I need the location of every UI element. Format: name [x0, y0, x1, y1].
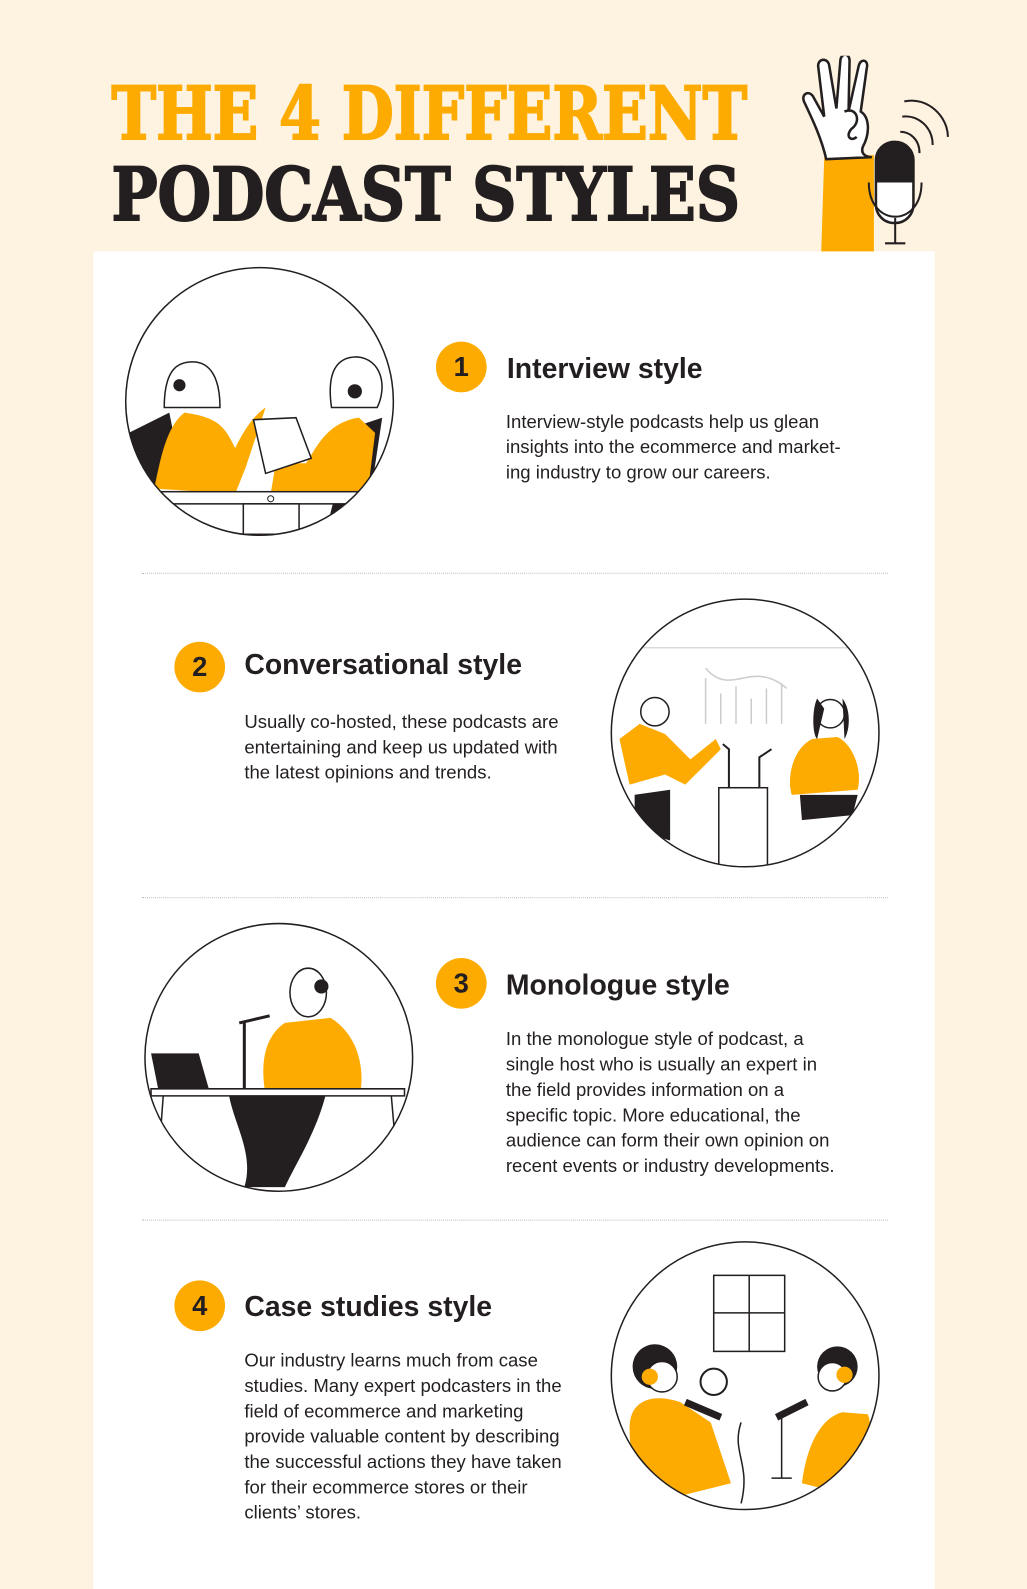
badge 1: 1 [454, 352, 469, 382]
text 2: the latest opinions and trends. [244, 761, 492, 783]
illustration: case studies [610, 1241, 880, 1510]
heading 1: Interview style [507, 353, 703, 384]
badge 3: 3 [454, 968, 469, 999]
title [111, 73, 748, 235]
text 2: entertaining and keep us updated with [244, 736, 558, 757]
text 1: ing industry to grow our careers. [506, 461, 771, 483]
badge 3 [436, 958, 487, 1009]
text 4: field of ecommerce and marketing [244, 1400, 524, 1421]
panel: content [93, 251, 935, 1589]
badge 1 [436, 342, 487, 392]
text 1: Interview-style podcasts help us glean [506, 411, 819, 432]
text 3: single host who is usually an expert in [506, 1053, 817, 1075]
illustration: interview [124, 266, 394, 536]
text 4: Our industry learns much from case [244, 1349, 538, 1371]
text 1: insights into the ecommerce and market- [506, 436, 841, 457]
text 3: audience can form their own opinion on [506, 1129, 829, 1151]
heading 3: Monologue style [506, 969, 730, 1001]
text 2 [244, 711, 559, 783]
badge 4 [174, 1280, 225, 1331]
text 4: the successful actions they have taken [244, 1451, 562, 1472]
badge 4: 4 [192, 1291, 207, 1321]
text 3: specific topic. More educational, the [506, 1104, 801, 1125]
text 1 [506, 411, 841, 483]
text 4: for their ecommerce stores or their [244, 1476, 528, 1497]
text 2: Usually co-hosted, these podcasts are [244, 711, 559, 732]
badge 2: 2 [192, 652, 207, 682]
text 3: the field provides information on a [506, 1079, 784, 1100]
text 3: recent events or industry developments. [506, 1155, 835, 1176]
heading 2: Conversational style [244, 649, 522, 680]
text 4 [244, 1349, 562, 1523]
illustration: monologue [144, 922, 414, 1192]
text 4: provide valuable content by describing [244, 1425, 560, 1447]
icon: hand with microphone [802, 56, 949, 252]
text 4: clients’ stores. [244, 1501, 361, 1523]
text 4: studies. Many expert podcasters in the [244, 1375, 562, 1396]
heading 4: Case studies style [244, 1291, 492, 1322]
text 3: In the monologue style of podcast, a [506, 1028, 804, 1049]
illustration: conversational [610, 598, 880, 868]
text 3 [506, 1028, 835, 1176]
badge 2 [174, 642, 225, 692]
